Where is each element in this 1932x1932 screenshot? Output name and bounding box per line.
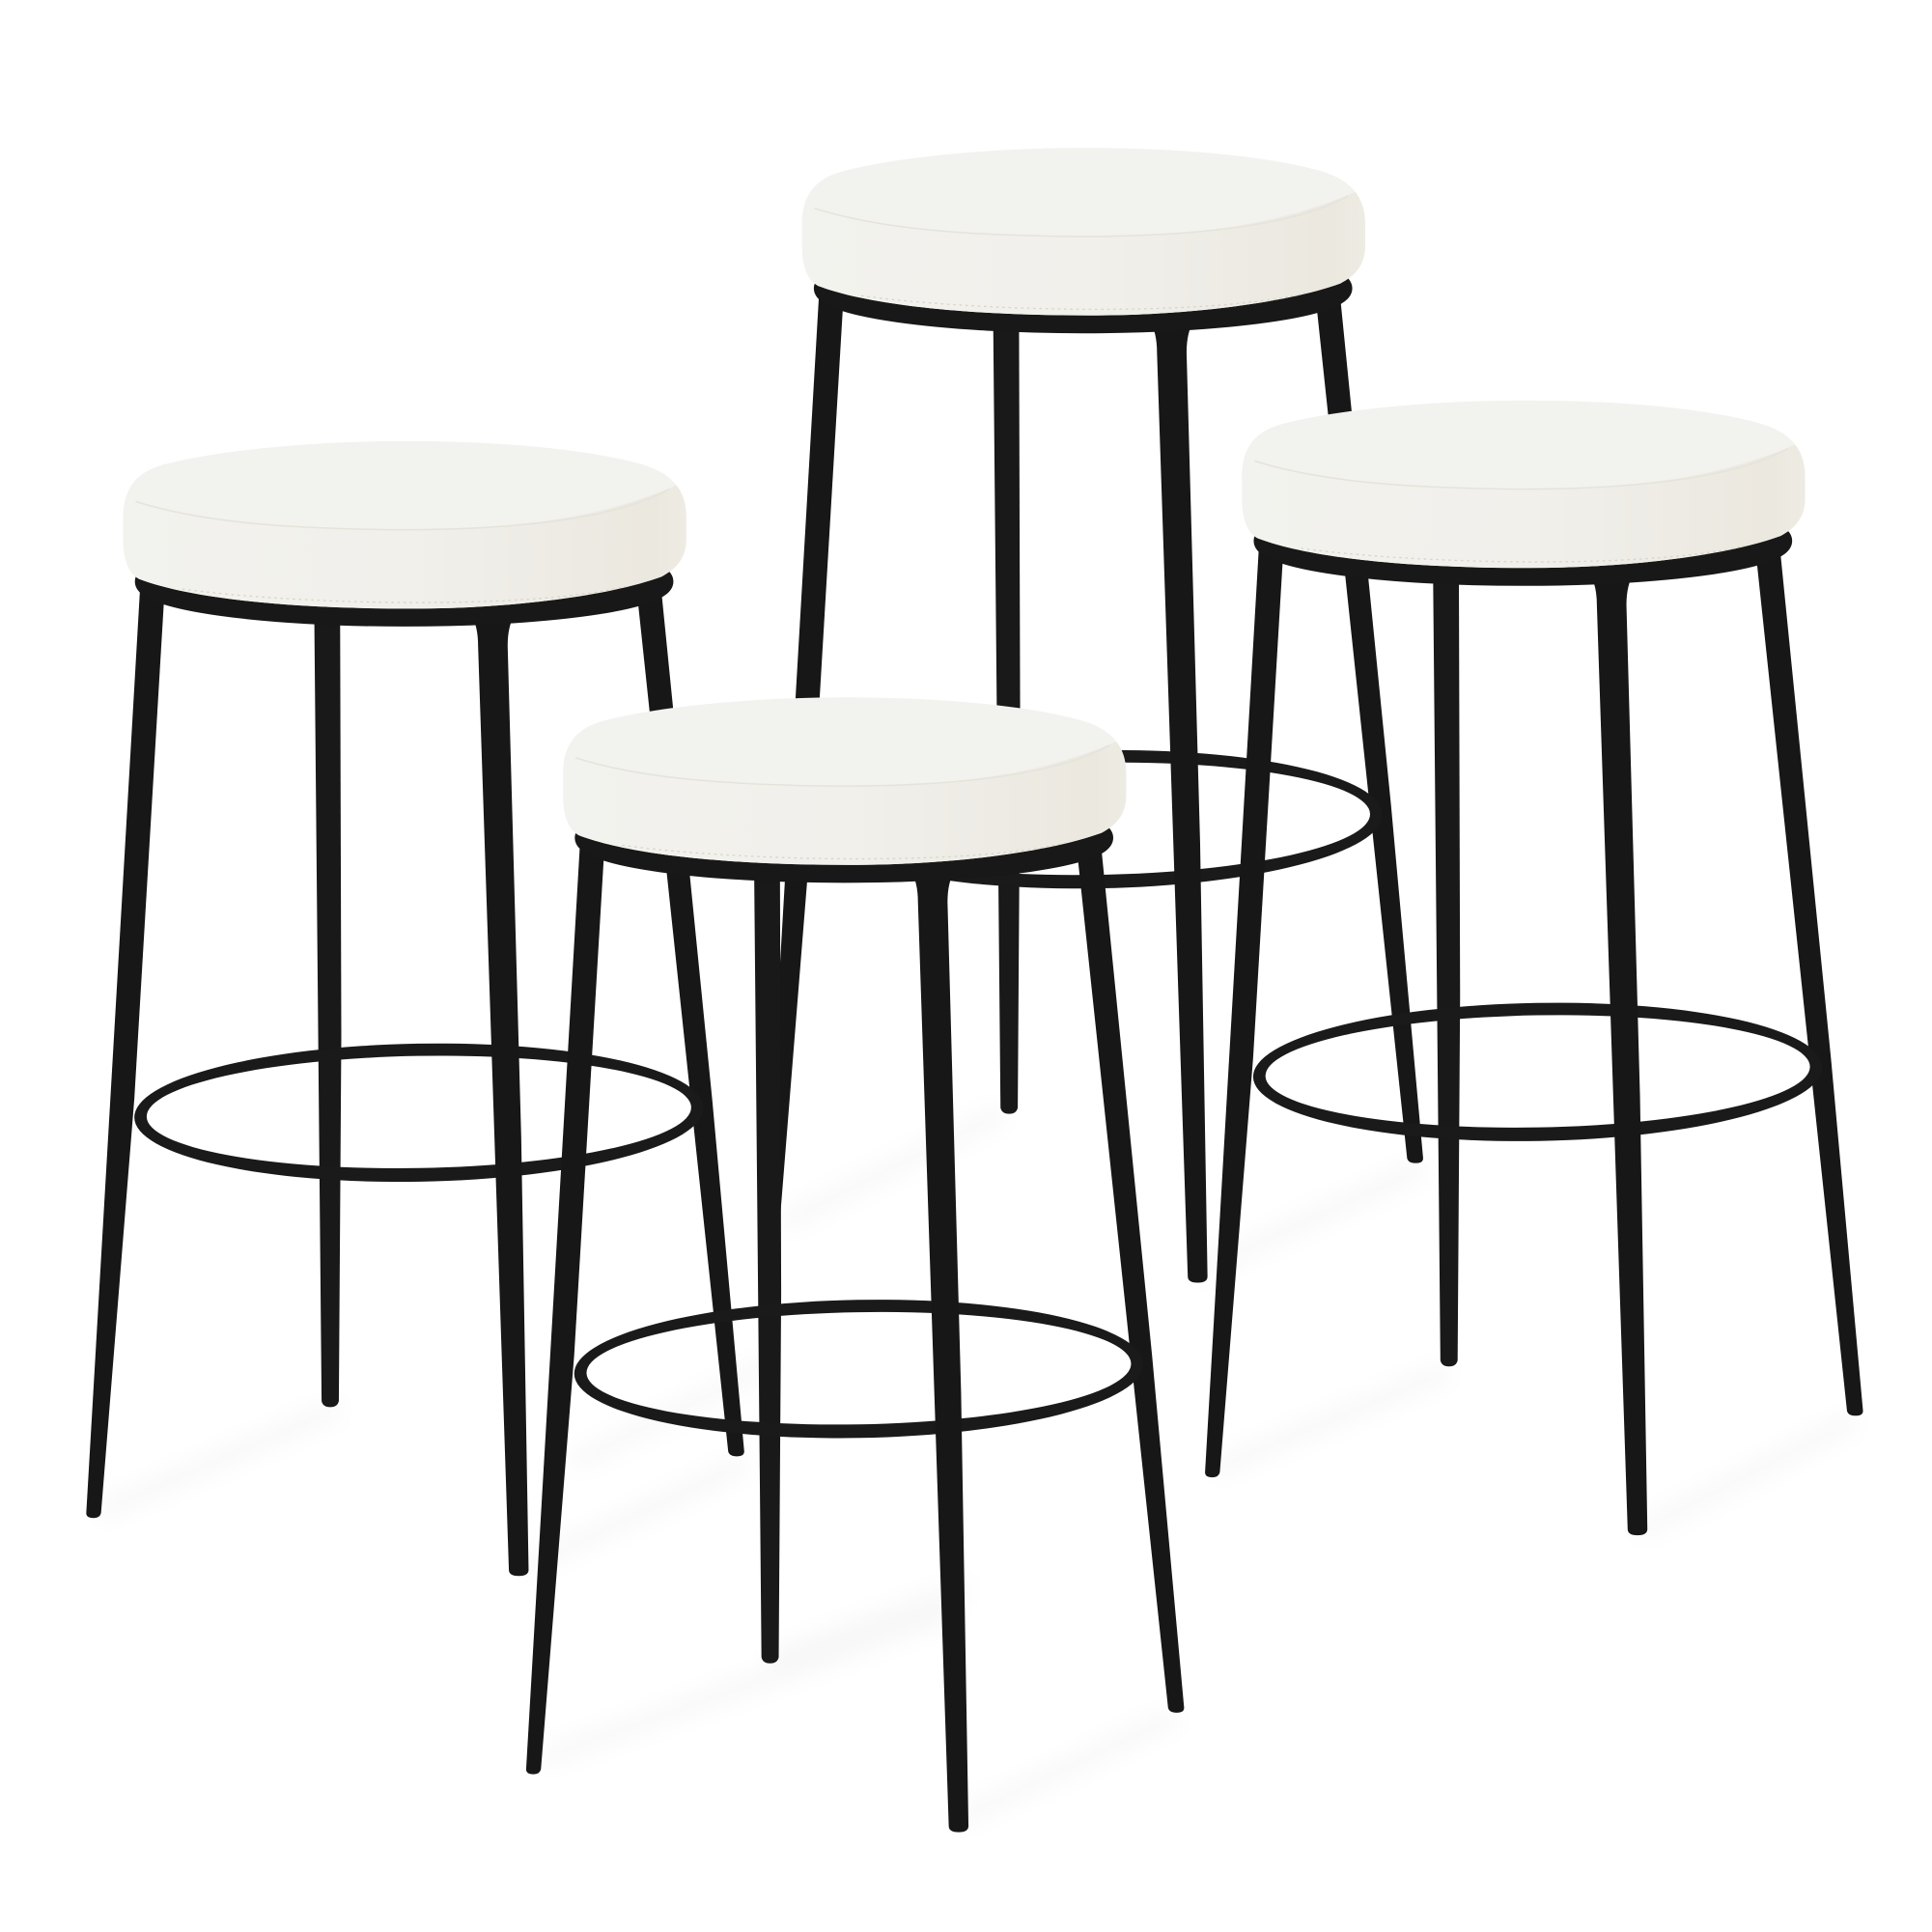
seat frame [143, 545, 665, 619]
floor shadows [104, 1115, 1848, 1817]
cushion [1242, 401, 1806, 568]
front leg [910, 870, 968, 1833]
seat frame [1262, 504, 1784, 578]
seat frame [583, 800, 1106, 875]
stool: right [1205, 401, 1863, 1535]
left leg [526, 838, 605, 1775]
back leg [314, 606, 341, 1407]
footrest ring [573, 1295, 1144, 1442]
back leg [994, 313, 1021, 1114]
right leg [1754, 541, 1863, 1415]
stool: back centre [765, 148, 1423, 1282]
back leg [754, 862, 781, 1664]
footrest ring [812, 745, 1384, 893]
cushion [801, 148, 1365, 316]
seat frame [822, 251, 1344, 325]
front leg [1150, 321, 1208, 1282]
cushion [124, 441, 686, 608]
footrest ring [133, 1039, 705, 1187]
front leg [470, 614, 528, 1576]
right leg [635, 581, 744, 1456]
stool: front [526, 697, 1184, 1833]
left leg [1205, 541, 1284, 1477]
footrest ring [1252, 998, 1824, 1146]
cushion [563, 697, 1126, 865]
right leg [1315, 289, 1423, 1163]
stool: left [86, 441, 744, 1576]
left leg [765, 289, 844, 1224]
left leg [86, 581, 165, 1518]
right leg [1076, 838, 1184, 1713]
back leg [1433, 566, 1460, 1366]
front leg [1589, 573, 1647, 1535]
